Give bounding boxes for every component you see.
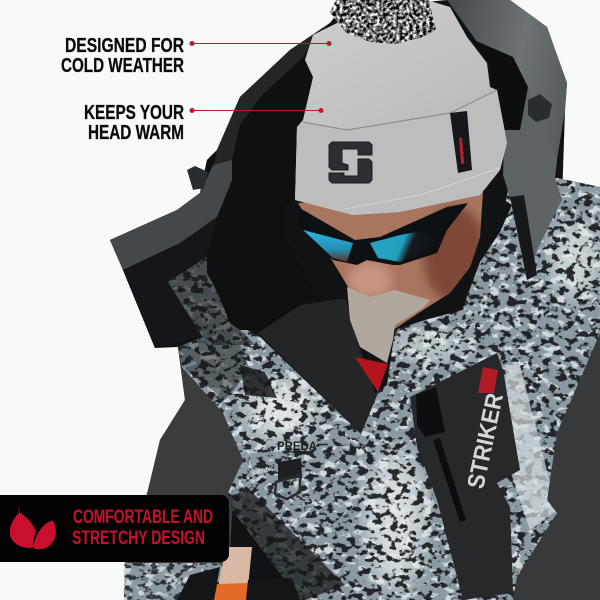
D-ring pocket patch [251,458,302,499]
icon: feather [10,505,56,549]
lower left sleeve camo [124,563,222,600]
callout: keeps your head warm: KEEPS YOUR [84,102,184,124]
surefloat label: SUREFLOAT [251,466,274,477]
beanie cuff [295,90,507,215]
callout: designed for cold weather: COLD WEATHER [61,55,184,77]
callout: designed for cold weather: DESIGNED FOR [65,35,184,57]
face [298,192,483,329]
badge: comfortable and stretchy design [0,495,229,562]
beanie tag [450,111,472,173]
hood lower strip [467,37,562,280]
quilted black chest panel [258,298,378,434]
beanie hat [295,0,507,215]
hood black interior and gray rim [110,23,340,348]
brand text: STRIKER [462,391,509,491]
beanie S logo [329,142,372,183]
beard [347,287,430,363]
callout: keeps your head warm: HEAD WARM [88,122,184,144]
black fleece collar [207,193,317,330]
badge: comfortable and stretchy design: COMFORTABLE AND [73,506,213,528]
jacket label text: PREDA [277,439,317,453]
black inner hood by the face [285,190,512,393]
fleece flap [123,217,217,348]
hood toggles [187,94,552,190]
red shirt [355,357,388,392]
callout: keeps your head warm [84,102,324,144]
camo jacket body [160,175,600,600]
callout: designed for cold weather [61,35,332,77]
badge: comfortable and stretchy design: STRETCHY DESIGN [72,527,205,549]
hood outer shell [447,0,567,280]
pom-pom [330,0,436,44]
dark right sleeve [513,325,600,600]
black zipper placket with brand [410,353,520,600]
sunglasses [297,203,468,265]
dark left arm [124,347,243,570]
hand and glove [177,547,300,600]
